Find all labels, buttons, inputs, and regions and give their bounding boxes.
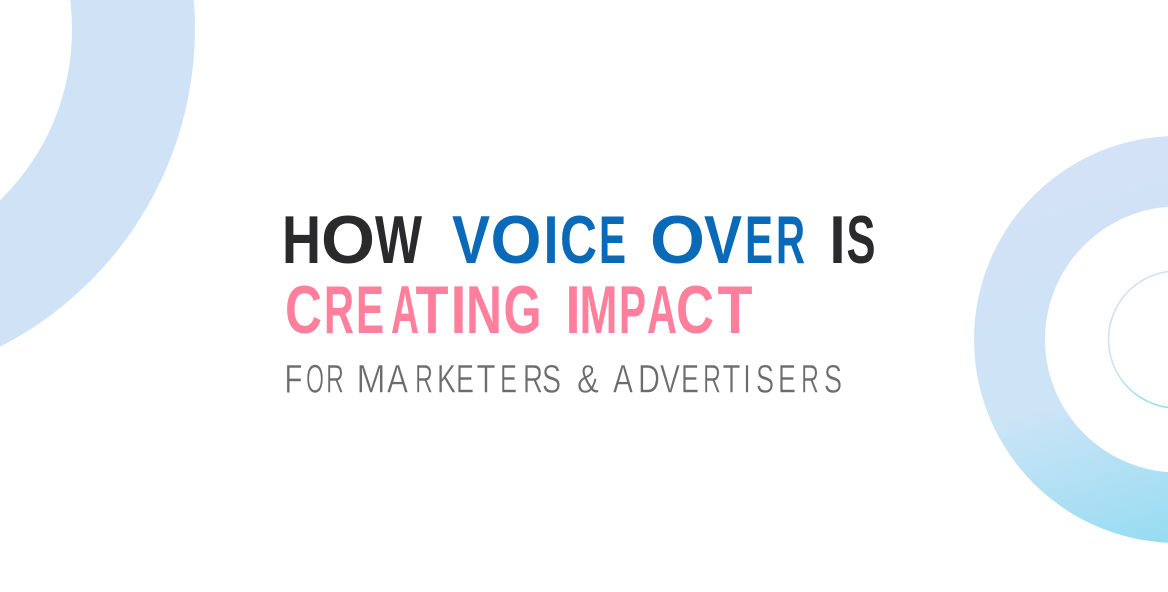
subtitle: A <box>387 358 408 402</box>
subtitle: & <box>577 358 599 402</box>
subtitle: E <box>456 358 474 402</box>
subtitle: I <box>743 358 751 402</box>
title line 2: M <box>580 272 618 348</box>
subtitle: E <box>681 358 699 402</box>
title line 1: V <box>452 202 490 278</box>
title line 2: C <box>285 272 322 348</box>
title line 1: O <box>650 202 705 278</box>
subtitle: M <box>356 358 386 402</box>
subtitle: S <box>756 358 774 402</box>
subtitle: R <box>703 358 721 402</box>
title line 1: I <box>544 202 558 278</box>
title line 1: R <box>776 202 805 278</box>
title line 1: O <box>490 202 542 278</box>
title line 1: V <box>704 202 742 278</box>
title line 2: I <box>566 272 580 348</box>
title line 1: H <box>282 202 321 278</box>
subtitle: D <box>638 358 660 402</box>
decorative ring: top left <box>0 0 195 386</box>
title line 2: C <box>676 272 714 348</box>
subtitle: R <box>326 358 344 402</box>
subtitle: T <box>722 358 740 402</box>
title line 2: T <box>718 272 752 348</box>
subtitle: S <box>824 358 842 402</box>
subtitle: R <box>801 358 819 402</box>
title line 2: A <box>391 272 419 348</box>
subtitle: F <box>284 358 302 402</box>
title line 2: A <box>647 272 677 348</box>
subtitle: T <box>476 358 496 402</box>
title line 2: E <box>356 272 384 348</box>
title line 2: T <box>416 272 448 348</box>
subtitle: K <box>437 358 456 402</box>
title <box>282 202 876 348</box>
subtitle: E <box>778 358 796 402</box>
title line 1: E <box>745 202 773 278</box>
title line 1: C <box>560 202 597 278</box>
title line 2: P <box>619 272 646 348</box>
decorative ring: right, large <box>974 136 1168 543</box>
title line 1: I <box>830 202 846 278</box>
title line 1: O <box>321 202 375 278</box>
subtitle: R <box>523 358 543 402</box>
title line 2: I <box>450 272 466 348</box>
title line 1: E <box>599 202 626 278</box>
title line 2: R <box>324 272 354 348</box>
subtitle: V <box>660 358 680 402</box>
subtitle: A <box>613 358 633 402</box>
title line 1: W <box>375 202 423 278</box>
decorative ring: right, thin inner <box>1108 271 1168 408</box>
title line 1 <box>282 202 876 278</box>
subtitle: S <box>542 358 561 402</box>
title line 2: N <box>466 272 502 348</box>
subtitle: O <box>306 358 324 402</box>
subtitle: E <box>500 358 517 402</box>
subtitle: R <box>415 358 433 402</box>
title line 2 <box>285 272 752 348</box>
subtitle <box>284 358 842 402</box>
title line 2: G <box>504 272 542 348</box>
title line 1: S <box>846 202 876 278</box>
